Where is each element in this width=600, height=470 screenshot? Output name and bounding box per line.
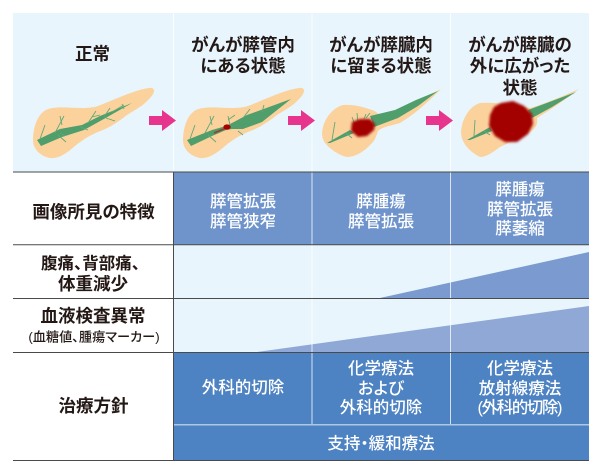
heading: cancer in duct: にある状態	[200, 56, 286, 76]
chart: abdominal pain severity wedge	[380, 252, 589, 298]
heading: cancer beyond pancreas: 外に広がった	[470, 56, 570, 76]
imaging findings: extended stage: 膵萎縮	[495, 219, 545, 238]
tumor: medium	[351, 119, 375, 137]
row label: blood test: (血糖値、腫瘍マーカー)	[28, 328, 160, 344]
panel: treatment band	[173, 352, 589, 460]
heading: normal: 正常	[75, 44, 110, 64]
row label: blood test: 血液検査異常	[40, 306, 146, 326]
heading: cancer within pancreas: に留まる状態	[330, 56, 432, 76]
imaging findings: duct stage: 膵管拡張	[210, 192, 276, 211]
treatment: supportive and palliative care: 支持・緩和療法	[327, 434, 435, 453]
chart: blood test abnormality wedge	[257, 306, 589, 352]
heading: cancer beyond pancreas: がんが膵臓の	[468, 35, 572, 55]
treatment: contained stage: 化学療法	[348, 359, 414, 378]
heading: cancer in duct: がんが膵管内	[191, 35, 295, 55]
imaging findings: extended stage: 膵管拡張	[487, 200, 554, 219]
imaging findings: duct stage: 膵管狭窄	[210, 212, 276, 231]
treatment: extended stage: (外科的切除)	[478, 398, 562, 417]
imaging findings: duct stage	[210, 192, 276, 231]
heading: cancer beyond pancreas: 状態	[502, 78, 538, 98]
row label: blood test	[28, 306, 160, 344]
row label: symptoms	[41, 253, 140, 294]
treatment: duct stage: 外科的切除	[202, 378, 285, 397]
panel: stage header background	[13, 13, 589, 172]
treatment: contained stage: 外科的切除	[340, 398, 423, 417]
heading: cancer beyond pancreas	[468, 35, 572, 98]
imaging findings: contained stage: 膵腫瘍	[356, 192, 406, 211]
treatment: extended stage: 化学療法	[487, 359, 554, 378]
imaging findings: extended stage	[487, 180, 554, 238]
panel: imaging findings band	[173, 172, 589, 245]
panel: symptom rows background	[173, 245, 589, 352]
row label: symptoms: 体重減少	[58, 274, 128, 294]
icon: pancreas with cancer in duct	[183, 88, 304, 158]
heading: cancer in duct	[191, 35, 295, 76]
icon: normal pancreas	[33, 88, 154, 158]
row label: treatment policy: 治療方針	[58, 396, 128, 416]
icon: pancreas with contained tumor	[322, 89, 441, 157]
row label: imaging findings: 画像所見の特徴	[32, 202, 155, 222]
imaging findings: contained stage: 膵管拡張	[348, 212, 414, 231]
icon: pancreas with large tumor	[461, 89, 579, 157]
tumor: small	[223, 124, 231, 130]
tumor: large	[489, 101, 533, 142]
arrow: normal to duct stage	[149, 110, 176, 131]
treatment: extended stage	[478, 359, 562, 417]
heading: cancer within pancreas	[329, 35, 433, 76]
arrow: pancreas to extended stage	[426, 110, 453, 131]
treatment: extended stage: 放射線療法	[479, 379, 562, 398]
arrow: duct to pancreas stage	[288, 110, 315, 131]
heading: cancer within pancreas: がんが膵臓内	[329, 35, 433, 55]
row label: symptoms: 腹痛、背部痛、	[41, 253, 140, 273]
treatment: contained stage	[340, 359, 423, 417]
imaging findings: extended stage: 膵腫瘍	[495, 180, 545, 199]
treatment: contained stage: および	[358, 379, 405, 398]
imaging findings: contained stage	[348, 192, 414, 231]
